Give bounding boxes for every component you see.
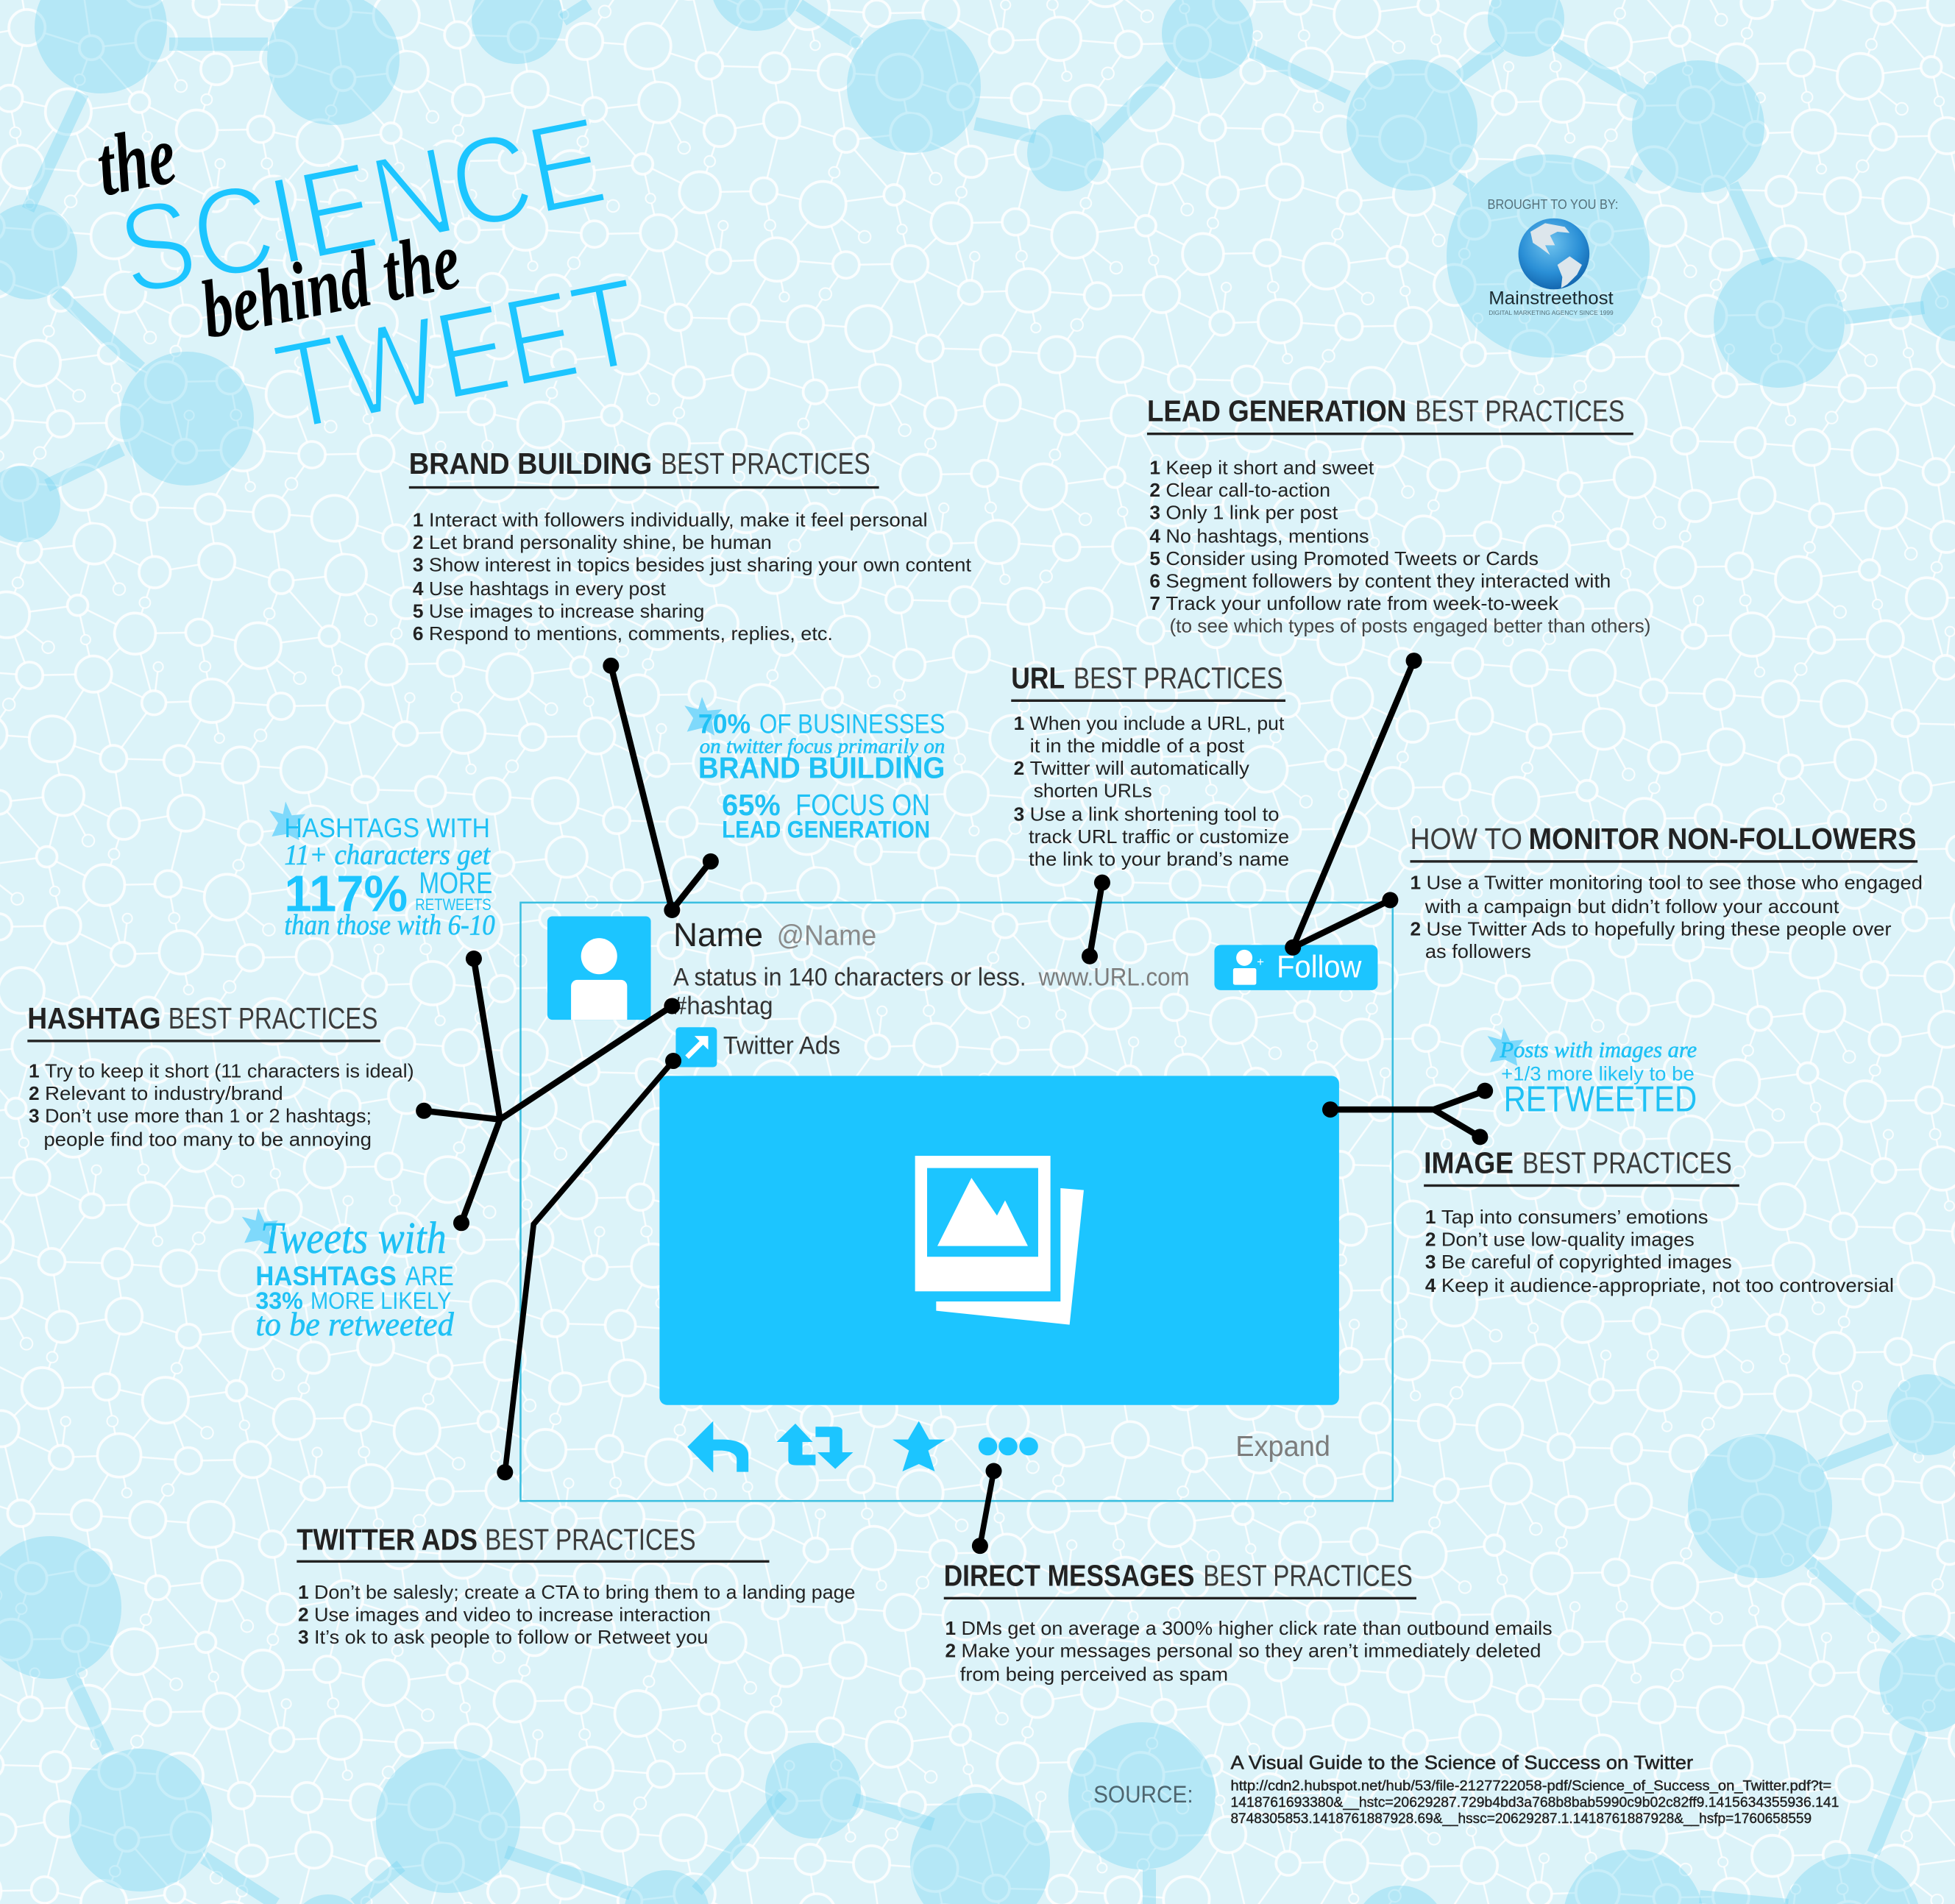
list: 3 xyxy=(298,1626,309,1648)
tweet name: Name xyxy=(673,916,763,953)
list: Use a Twitter monitoring tool to see those who engaged xyxy=(1427,872,1923,894)
sponsor logo: Mainstreethost xyxy=(1489,288,1614,308)
list: 2 xyxy=(298,1603,309,1625)
list: Clear call-to-action xyxy=(1165,479,1330,501)
list: 1 xyxy=(1014,712,1024,734)
list xyxy=(1014,712,1289,870)
heading: BEST PRACTICES xyxy=(1522,1146,1732,1180)
heading: IMAGE xyxy=(1424,1146,1514,1180)
source reference: 8748305853.1418761887928.69&__hssc=20629287.1.1418761887928&__hsfp=1760658559 xyxy=(1230,1811,1812,1827)
icon: twitter ads arrow xyxy=(675,1027,717,1067)
stat: hashtags 117 percent: HASHTAGS WITH xyxy=(284,812,490,843)
tweet image placeholder xyxy=(659,1076,1339,1405)
list: 7 xyxy=(1149,592,1160,614)
stat: tweets with hashtags: ARE xyxy=(405,1260,454,1291)
heading: TWITTER ADS xyxy=(297,1522,478,1556)
list: Use images and video to increase interaction xyxy=(314,1603,711,1625)
panel: lead generation xyxy=(1147,394,1651,637)
connector: twitter ads xyxy=(497,1053,681,1480)
list: When you include a URL, put xyxy=(1030,712,1285,734)
list: from being perceived as spam xyxy=(960,1663,1228,1685)
title word: TWEET: TWEET xyxy=(266,251,650,458)
panel: monitor non-followers xyxy=(1410,822,1923,962)
stat: tweets with hashtags: 33% xyxy=(255,1287,303,1314)
list: Make your messages personal so they aren’t immediately deleted xyxy=(961,1639,1541,1661)
stat: 70 percent brand building: OF BUSINESSES xyxy=(759,708,945,739)
source reference: http://cdn2.hubspot.net/hub/53/file-2127722058-pdf/Science_of_Success_on_Twitter.pdf?t= xyxy=(1230,1777,1831,1794)
list: 6 xyxy=(413,622,424,644)
list xyxy=(1425,1206,1894,1296)
tweet status: www.URL.com xyxy=(1038,963,1190,991)
connector: url xyxy=(1082,875,1110,965)
title words: behind the: behind the xyxy=(194,215,467,356)
connector: hashtag xyxy=(416,951,680,1231)
list: Tap into consumers’ emotions xyxy=(1441,1206,1708,1228)
icon: retweet xyxy=(776,1424,853,1469)
panel: url xyxy=(1011,661,1289,870)
list: Only 1 link per post xyxy=(1165,501,1338,523)
list: 2 xyxy=(1149,479,1160,501)
stat: 70 percent brand building: FOCUS ON xyxy=(795,788,930,822)
follow button xyxy=(1214,945,1377,990)
list: people find too many to be annoying xyxy=(43,1129,372,1151)
list: 5 xyxy=(1149,547,1160,569)
stat: 70 percent brand building: on twitter focus primarily on xyxy=(700,734,945,758)
source reference xyxy=(1230,1751,1839,1827)
list: Twitter will automatically xyxy=(1030,757,1250,779)
stat: posts with images: Posts with images are xyxy=(1499,1037,1697,1062)
sponsor logo xyxy=(1488,196,1618,316)
list xyxy=(1149,456,1651,637)
icon: star xyxy=(269,802,305,840)
stat: 70 percent brand building: BRAND BUILDING xyxy=(698,750,945,784)
source reference: 1418761693380&__hstc=20629287.729b4bd3a768b8bab5990c9b02c82ff9.1415634355936.141 xyxy=(1230,1794,1839,1811)
list: shorten URLs xyxy=(1034,779,1152,801)
expand label: Expand xyxy=(1235,1431,1330,1463)
list: 2 xyxy=(1425,1228,1436,1250)
list: No hashtags, mentions xyxy=(1165,525,1369,547)
heading: MONITOR NON-FOLLOWERS xyxy=(1528,822,1916,856)
list: Don’t use more than 1 or 2 hashtags; xyxy=(45,1105,372,1127)
list: 6 xyxy=(1149,570,1160,592)
list xyxy=(945,1617,1553,1685)
list: 1 xyxy=(945,1617,956,1639)
icon: globe xyxy=(1519,219,1589,289)
list: 2 xyxy=(945,1639,956,1661)
stat: hashtags 117 percent: than those with 6-10 xyxy=(284,909,495,941)
list xyxy=(29,1060,414,1151)
stat: posts with images: +1/3 more likely to be xyxy=(1501,1062,1695,1084)
list: track URL traffic or customize xyxy=(1029,825,1289,848)
stat: 70 percent brand building xyxy=(684,697,945,843)
list: 3 xyxy=(413,554,424,576)
heading: BEST PRACTICES xyxy=(168,1001,377,1035)
list: Consider using Promoted Tweets or Cards xyxy=(1165,547,1539,569)
stat: posts with images: RETWEETED xyxy=(1504,1080,1697,1120)
list: Show interest in topics besides just sharing your own content xyxy=(429,554,972,576)
icon: star xyxy=(242,1208,278,1246)
icon: star xyxy=(684,697,722,736)
list xyxy=(1410,872,1923,962)
list: Don’t be salesly; create a CTA to bring them to a landing page xyxy=(314,1581,855,1603)
list xyxy=(413,509,972,644)
stat: tweets with hashtags: MORE LIKELY xyxy=(311,1287,451,1314)
heading: BRAND BUILDING xyxy=(409,447,652,480)
stat: tweets with hashtags xyxy=(242,1208,454,1343)
icon: avatar xyxy=(547,916,651,1020)
list: Don’t use low-quality images xyxy=(1441,1228,1695,1250)
panel: brand building xyxy=(409,447,972,644)
list: 2 xyxy=(1410,917,1421,939)
stat: hashtags 117 percent: 117% xyxy=(284,865,408,923)
panel: direct messages xyxy=(944,1558,1553,1685)
icon: favourite star xyxy=(893,1421,945,1471)
follow button: + xyxy=(1257,955,1264,969)
list: 4 xyxy=(413,578,424,600)
tweet status: A status in 140 characters or less. xyxy=(673,963,1026,991)
list: it in the middle of a post xyxy=(1030,734,1245,756)
list: Let brand personality shine, be human xyxy=(429,531,772,553)
list: 1 xyxy=(1149,456,1160,478)
icon: star xyxy=(1488,1027,1524,1066)
list: Be careful of copyrighted images xyxy=(1441,1251,1732,1273)
follow button: Follow xyxy=(1277,949,1362,984)
list: 3 xyxy=(1149,501,1160,523)
source label: SOURCE: xyxy=(1093,1781,1193,1808)
tweet hashtag: #hashtag xyxy=(673,992,773,1020)
panel: tweet frame xyxy=(520,903,1393,1501)
heading: BEST PRACTICES xyxy=(661,447,870,480)
list: 2 xyxy=(1014,757,1024,779)
list: as followers xyxy=(1425,940,1531,962)
list: 1 xyxy=(1425,1206,1436,1228)
stat: 70 percent brand building: 70% xyxy=(698,708,751,739)
list: Interact with followers individually, make it feel personal xyxy=(429,509,928,531)
list: Keep it audience-appropriate, not too controversial xyxy=(1441,1274,1894,1296)
list: 5 xyxy=(413,600,424,622)
list: DMs get on average a 300% higher click rate than outbound emails xyxy=(961,1617,1553,1639)
heading: BEST PRACTICES xyxy=(1415,394,1625,428)
list: Respond to mentions, comments, replies, etc. xyxy=(429,622,833,644)
connector: image xyxy=(1322,1083,1493,1145)
stat: tweets with hashtags: Tweets with xyxy=(260,1214,447,1263)
list: 2 xyxy=(29,1082,40,1104)
tweet name: @Name xyxy=(777,920,876,951)
list xyxy=(298,1581,855,1648)
list: It’s ok to ask people to follow or Retweet you xyxy=(314,1626,708,1648)
list: Use Twitter Ads to hopefully bring these people over xyxy=(1427,917,1892,939)
stat: tweets with hashtags: to be retweeted xyxy=(255,1305,454,1343)
heading: DIRECT MESSAGES xyxy=(944,1558,1194,1592)
connector: brand building xyxy=(603,658,719,918)
stat: 70 percent brand building: 65% xyxy=(722,788,781,822)
list: the link to your brand’s name xyxy=(1029,848,1289,870)
title word: SCIENCE: SCIENCE xyxy=(108,90,615,322)
twitter ads label: Twitter Ads xyxy=(723,1032,840,1060)
panel: hashtag xyxy=(27,1001,414,1151)
heading: BEST PRACTICES xyxy=(1203,1558,1413,1592)
stat: hashtags 117 percent: MORE xyxy=(419,866,492,900)
title word: the: the xyxy=(89,107,183,214)
list: 4 xyxy=(1149,525,1160,547)
list: 3 xyxy=(29,1105,40,1127)
panel: twitter ads xyxy=(297,1522,855,1648)
list: with a campaign but didn’t follow your account xyxy=(1424,895,1839,917)
list: 1 xyxy=(29,1060,40,1082)
list: 1 xyxy=(1410,872,1421,894)
list: Track your unfollow rate from week-to-week xyxy=(1165,592,1559,614)
sponsor logo: DIGITAL MARKETING AGENCY SINCE 1999 xyxy=(1489,309,1614,316)
heading: BEST PRACTICES xyxy=(485,1522,696,1556)
heading: URL xyxy=(1011,661,1065,695)
list: 2 xyxy=(413,531,424,553)
heading: LEAD GENERATION xyxy=(1147,394,1406,428)
stat: hashtags 117 percent: RETWEETS xyxy=(415,895,492,914)
list: Relevant to industry/brand xyxy=(45,1082,283,1104)
icon: more dots xyxy=(979,1438,1038,1455)
connector: lead generation and monitoring xyxy=(1285,653,1422,956)
list: Segment followers by content they interacted with xyxy=(1165,570,1611,592)
connector: direct messages xyxy=(972,1463,1002,1554)
icon: reply xyxy=(687,1421,748,1473)
list: 3 xyxy=(1014,803,1024,825)
list: Try to keep it short (11 characters is ideal) xyxy=(45,1060,414,1082)
icon: photo stack xyxy=(915,1156,1084,1325)
heading: BEST PRACTICES xyxy=(1074,661,1283,695)
list: Use a link shortening tool to xyxy=(1030,803,1280,825)
list: 4 xyxy=(1425,1274,1436,1296)
list: Use hashtags in every post xyxy=(429,578,667,600)
stat: hashtags 117 percent: 11+ characters get xyxy=(284,839,491,870)
list: 1 xyxy=(298,1581,309,1603)
stat: posts with images xyxy=(1488,1027,1697,1120)
stat: hashtags 117 percent xyxy=(269,802,495,941)
list: (to see which types of posts engaged better than others) xyxy=(1169,615,1651,637)
list: Use images to increase sharing xyxy=(429,600,704,622)
list: Keep it short and sweet xyxy=(1165,456,1374,478)
list: 1 xyxy=(413,509,424,531)
panel: image xyxy=(1424,1146,1894,1296)
sponsor logo: BROUGHT TO YOU BY: xyxy=(1488,196,1618,212)
heading: HASHTAG xyxy=(27,1001,161,1035)
source reference: A Visual Guide to the Science of Success on Twitter xyxy=(1230,1751,1693,1773)
list: 3 xyxy=(1425,1251,1436,1273)
stat: 70 percent brand building: LEAD GENERATION xyxy=(722,817,930,843)
tweet action icons xyxy=(687,1421,1038,1473)
heading: HOW TO xyxy=(1410,822,1522,856)
stat: tweets with hashtags: HASHTAGS xyxy=(255,1260,397,1291)
